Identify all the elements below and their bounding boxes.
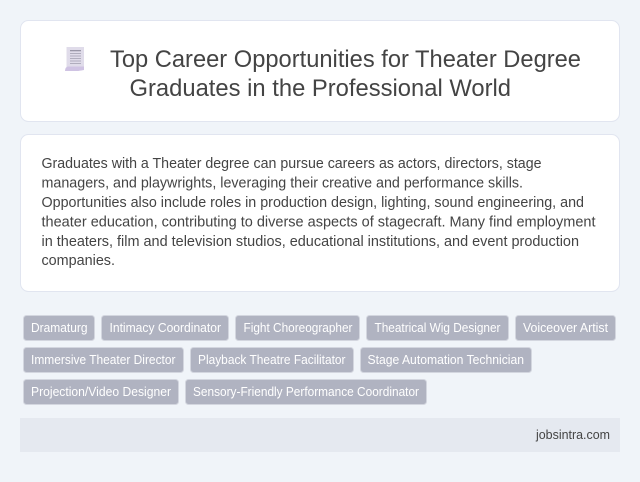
- text block: description: Opportunities also include roles in production design, lighting, sound engineering, and: [42, 195, 584, 211]
- text block: description: managers, and playwrights, leveraging their creative and performance skills.: [42, 175, 523, 191]
- tag: Intimacy Coordinator: [102, 316, 228, 340]
- tag: Immersive Theater Director: [24, 348, 184, 372]
- tag: Stage Automation Technician: [360, 348, 532, 372]
- text block: description: Graduates with a Theater degree can pursue careers as actors, directors, stage: [42, 156, 542, 172]
- tag: Theatrical Wig Designer: [366, 316, 508, 340]
- text block: description: theater education, contributing to diverse aspects of stagecraft. Many find employment: [42, 214, 596, 230]
- tag: Sensory-Friendly Performance Coordinator: [186, 380, 426, 404]
- tag list: career roles: [24, 316, 616, 404]
- tag: Playback Theatre Facilitator: [190, 348, 354, 372]
- text block: description: [42, 156, 596, 269]
- panel: description card: [20, 134, 620, 292]
- tag: Intimacy Coordinator: Intimacy Coordinator: [110, 320, 222, 335]
- title: [110, 46, 581, 102]
- tag: Fight Choreographer: Fight Choreographer: [244, 320, 353, 335]
- footer text: site name: jobsintra.com: [535, 427, 610, 442]
- title: Top Career Opportunities for Theater Degree: [110, 46, 581, 73]
- tag: Dramaturg: [24, 316, 94, 340]
- tag: Immersive Theater Director: Immersive Theater Director: [31, 352, 176, 367]
- tag: Projection/Video Designer: Projection/Video Designer: [31, 384, 172, 399]
- tag: Projection/Video Designer: [24, 380, 178, 404]
- tag: Voiceover Artist: Voiceover Artist: [523, 320, 608, 335]
- text block: description: in theaters, film and television studios, educational institutions, and event production: [42, 234, 579, 250]
- icon: paper scroll: [65, 47, 84, 71]
- tag: Sensory-Friendly Performance Coordinator: Sensory-Friendly Performance Coordinator: [193, 384, 420, 399]
- tag: Playback Theatre Facilitator: Playback Theatre Facilitator: [198, 352, 346, 367]
- tag: Stage Automation Technician: Stage Automation Technician: [368, 352, 524, 367]
- tag: Theatrical Wig Designer: Theatrical Wig Designer: [374, 320, 501, 335]
- text block: description: companies.: [42, 253, 115, 269]
- title: Graduates in the Professional World: [130, 75, 511, 102]
- tag: Voiceover Artist: [516, 316, 616, 340]
- tag: Dramaturg: Dramaturg: [31, 320, 88, 335]
- panel: title card: [20, 20, 620, 122]
- tag: Fight Choreographer: [236, 316, 360, 340]
- footer bar: [20, 418, 620, 452]
